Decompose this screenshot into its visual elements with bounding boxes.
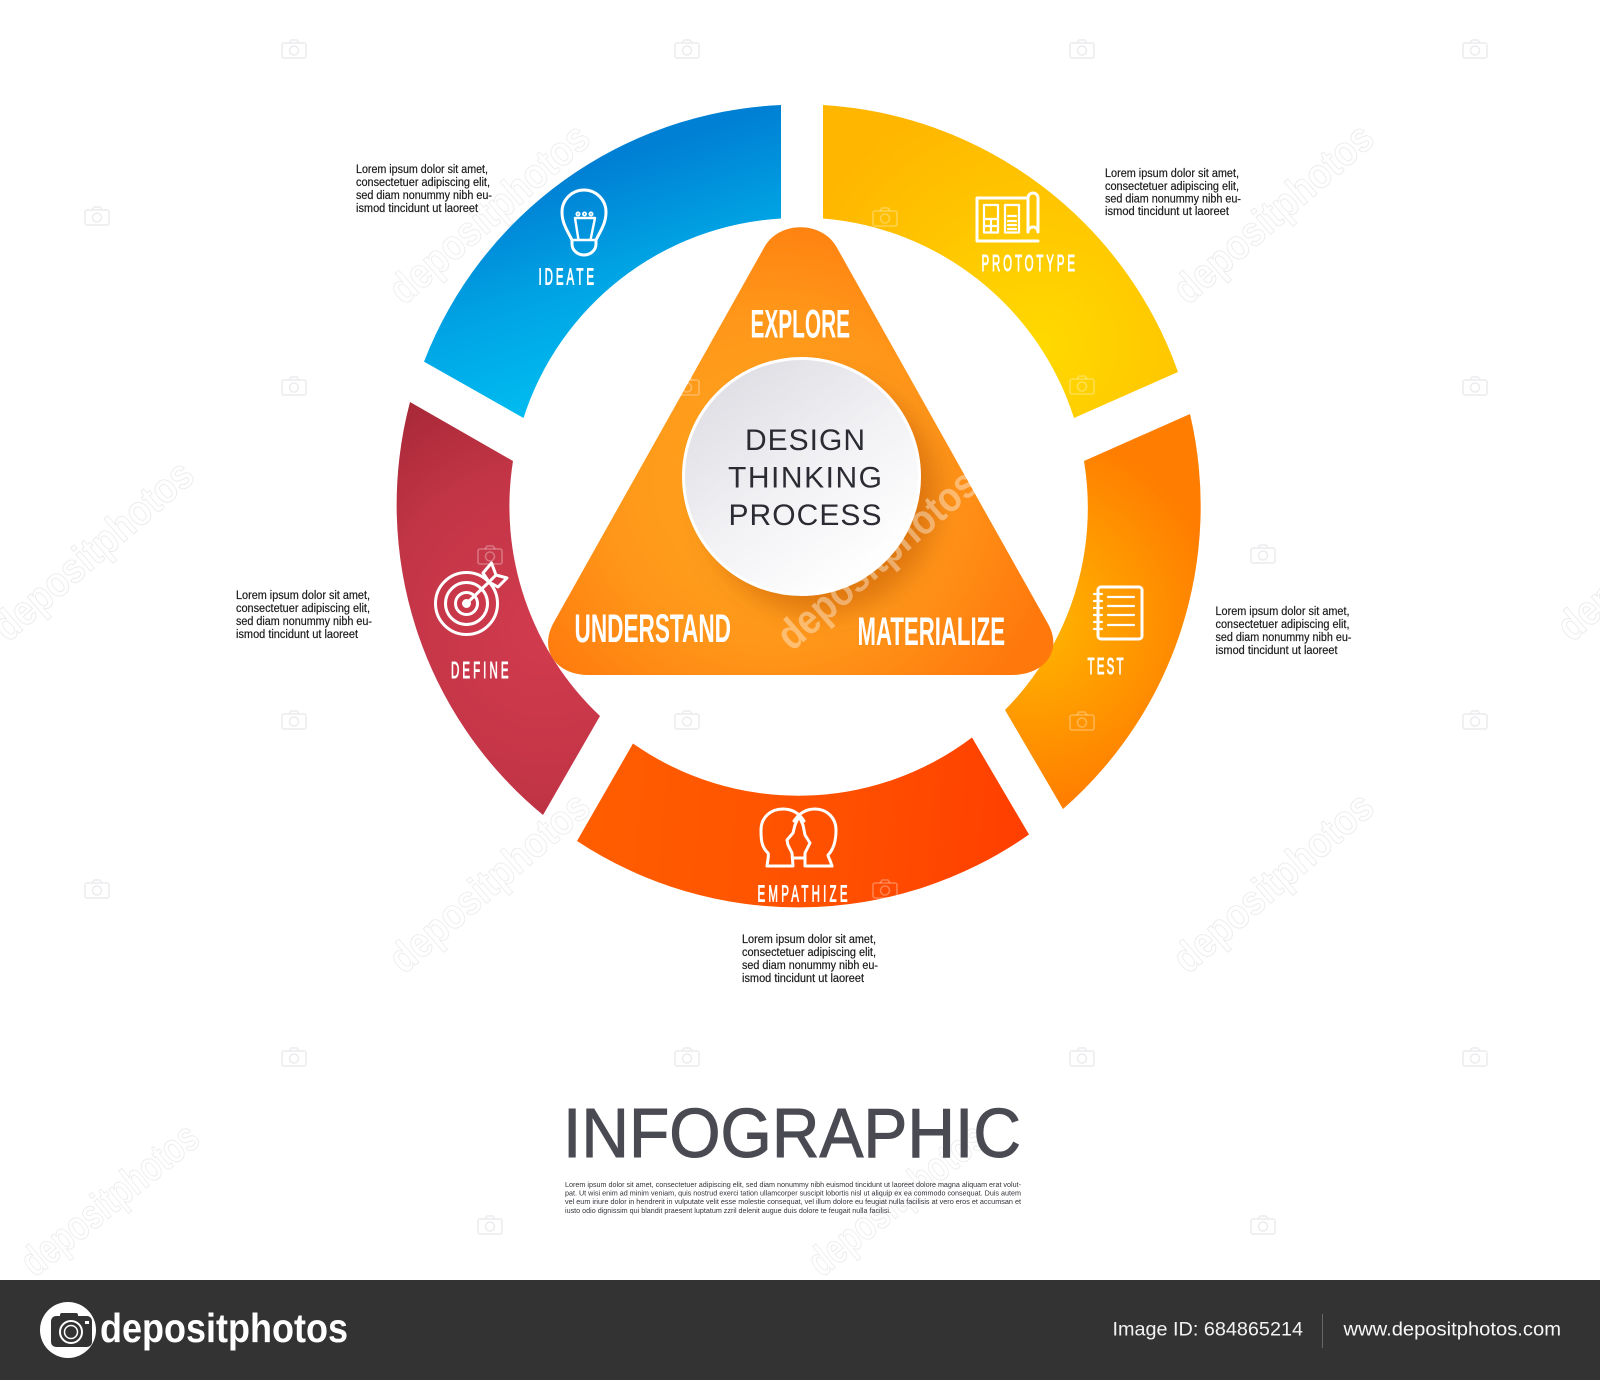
text block: ideate: sed diam nonummy nibh eu- <box>356 190 492 202</box>
panel: test segment <box>1005 414 1201 809</box>
logo: wordmark: depositphotos <box>100 1305 348 1351</box>
text block: empathize: sed diam nonummy nibh eu- <box>742 960 878 972</box>
text block: prototype: ismod tincidunt ut laoreet <box>1105 206 1230 218</box>
label: test: TEST <box>1088 654 1124 679</box>
text block: empathize: Lorem ipsum dolor sit amet, <box>742 934 876 946</box>
text block: define: Lorem ipsum dolor sit amet, <box>236 590 370 602</box>
title: design thinking process: PROCESS <box>728 499 882 532</box>
paragraph under heading: pat. Ut wisi enim ad minim veniam, quis nostrud exerci tation ullamcorper suscipit lobortis nisl ut aliquip ex ea commodo consequat. Duis autem <box>565 1188 1021 1198</box>
text block: ideate: ismod tincidunt ut laoreet <box>356 203 479 215</box>
paragraph under heading <box>565 1180 1022 1215</box>
text block: ideate <box>356 164 492 215</box>
text block: prototype: sed diam nonummy nibh eu- <box>1105 194 1241 206</box>
text block: test: consectetuer adipiscing elit, <box>1216 619 1350 631</box>
site url: www.depositphotos.com <box>1342 1318 1561 1340</box>
text block: test: ismod tincidunt ut laoreet <box>1216 645 1338 657</box>
text block: prototype: consectetuer adipiscing elit, <box>1105 181 1239 193</box>
title: design thinking process: DESIGN <box>745 424 865 457</box>
logo: camera badge <box>40 1302 96 1358</box>
watermark layer: depositphotos <box>379 113 599 313</box>
text block: define: consectetuer adipiscing elit, <box>236 603 370 615</box>
text block: define: ismod tincidunt ut laoreet <box>236 629 359 641</box>
text block: prototype: Lorem ipsum dolor sit amet, <box>1105 168 1239 180</box>
icon: two heads <box>761 809 836 866</box>
text block: empathize: consectetuer adipiscing elit, <box>742 947 876 959</box>
watermark layer: depositphotos <box>11 1113 208 1285</box>
label: explore: EXPLORE <box>750 302 850 346</box>
panel: center circle <box>684 358 920 594</box>
text block: test <box>1216 606 1352 657</box>
text block: empathize <box>742 934 878 985</box>
footer divider <box>1322 1314 1323 1348</box>
text block: test: Lorem ipsum dolor sit amet, <box>1216 606 1350 618</box>
text block: test: sed diam nonummy nibh eu- <box>1216 632 1352 644</box>
label: empathize: EMPATHIZE <box>758 881 848 907</box>
panel: central triangle <box>548 227 1053 675</box>
icon: blueprint <box>977 193 1038 241</box>
watermarks over ring and triangle <box>379 113 1094 982</box>
watermarks over ring and triangle: depositphotos <box>767 459 987 659</box>
icon: light bulb <box>562 190 606 255</box>
watermark layer: depositphotos <box>1163 782 1383 982</box>
icon: notebook <box>1094 587 1142 639</box>
icon: target with arrow <box>436 563 507 634</box>
text block: define <box>236 590 372 641</box>
image id: Image ID: 684865214 <box>1112 1318 1303 1340</box>
heading: infographic: INFOGRAPHIC <box>563 1094 1021 1172</box>
circle shadow on triangle <box>703 378 939 614</box>
label: prototype: PROTOTYPE <box>982 251 1075 276</box>
text block: ideate: Lorem ipsum dolor sit amet, <box>356 164 488 176</box>
watermarks over ring and triangle: depositphotos <box>379 113 599 313</box>
panel: empathize segment <box>577 738 1029 907</box>
text block: prototype <box>1105 168 1241 218</box>
text block: define: sed diam nonummy nibh eu- <box>236 616 372 628</box>
footer bar <box>0 1280 1600 1380</box>
title: design thinking process: THINKING <box>728 462 882 494</box>
panel: prototype segment <box>823 105 1178 418</box>
label: define: DEFINE <box>451 658 508 683</box>
label: ideate: IDEATE <box>538 264 594 289</box>
text block: ideate: consectetuer adipiscing elit, <box>356 177 490 189</box>
panel: ideate segment <box>424 105 781 418</box>
label: materialize: MATERIALIZE <box>858 610 1005 654</box>
title: design thinking process <box>728 424 882 532</box>
text block: empathize: ismod tincidunt ut laoreet <box>742 973 865 985</box>
watermark layer: depositphotos <box>379 782 599 982</box>
watermark layer: depositphotos <box>798 1113 995 1285</box>
panel: define segment <box>397 402 600 815</box>
watermarks over ring and triangle: depositphotos <box>379 782 599 982</box>
watermark layer: depositphotos <box>1163 113 1383 313</box>
label: understand: UNDERSTAND <box>574 607 731 651</box>
paragraph under heading: iusto odio dignissim qui blandit praesent luptatum zzril delenit augue duis dolore te feugait nulla facilisi. <box>565 1206 891 1215</box>
paragraph under heading: Lorem ipsum dolor sit amet, consectetuer adipiscing elit, sed diam nonummy nibh euismod tincidunt ut laoreet dolore magna aliquam erat volut- <box>565 1180 1021 1189</box>
paragraph under heading: vel eum iriure dolor in hendrerit in vulputate velit esse molestie consequat, vel illum dolore eu feugiat nulla facilisis at vero eros et accumsan et <box>565 1197 1022 1206</box>
